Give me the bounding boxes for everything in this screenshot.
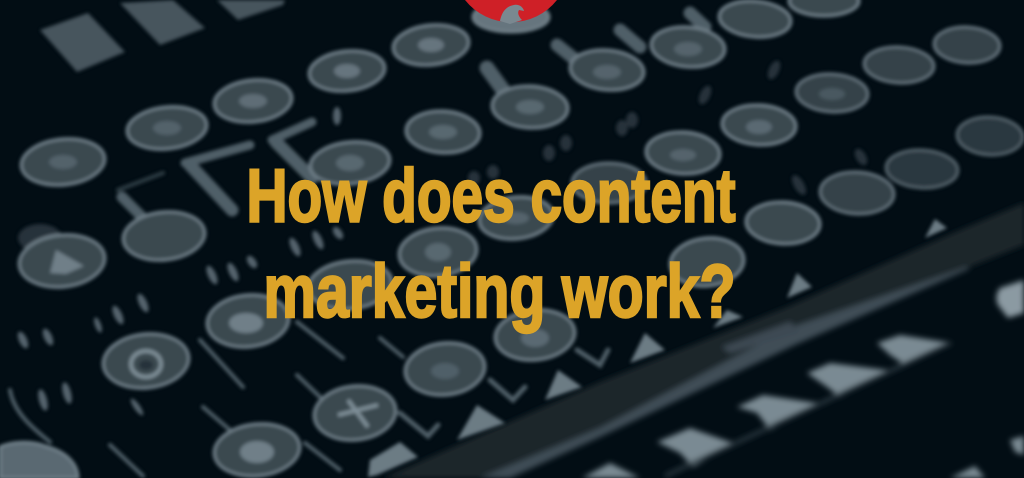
title line 2: marketing work? — [264, 249, 736, 333]
light strip — [480, 267, 969, 478]
logo: red circle with eagle — [465, 0, 557, 24]
small dashes — [16, 107, 345, 417]
right side block — [996, 280, 1024, 318]
title — [246, 154, 736, 333]
carriage bar — [383, 203, 1024, 478]
eagle mark — [500, 5, 524, 24]
key stems — [10, 13, 705, 476]
carriage highlight — [722, 322, 800, 353]
dim dashes — [468, 59, 870, 197]
title line 1: How does content — [246, 154, 736, 238]
triangular key stubs — [368, 219, 947, 477]
lower teeth — [582, 335, 1024, 478]
bottom left key, cut by frame — [0, 442, 78, 478]
key centres — [49, 38, 845, 463]
tooth rail — [665, 343, 950, 476]
carriage bar and teeth, soft focus — [383, 203, 1024, 478]
blob behind A key — [18, 224, 62, 252]
upper left square keys — [40, 0, 285, 72]
